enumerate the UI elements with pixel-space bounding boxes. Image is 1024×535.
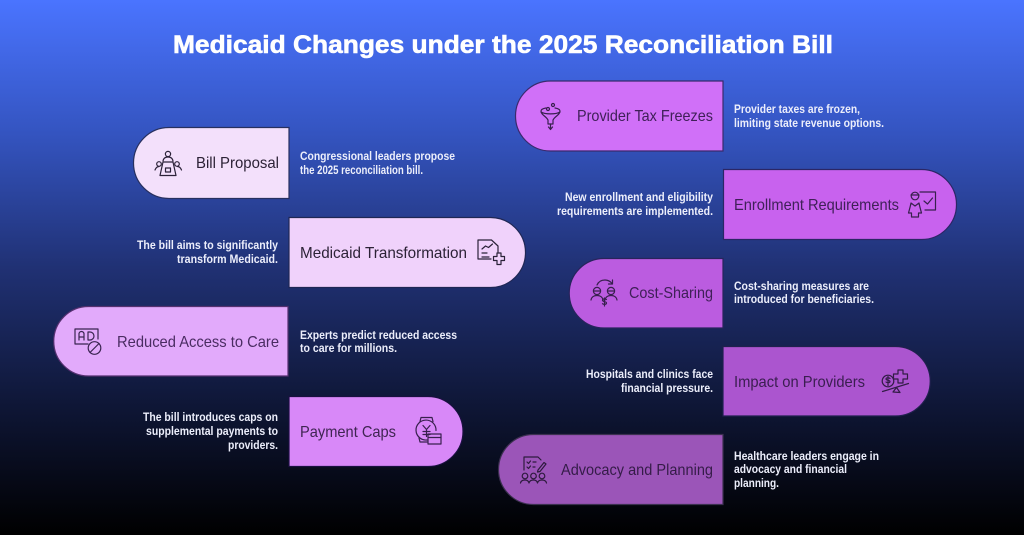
icon: document with chart and plus — [478, 240, 504, 264]
description: advocacy and planning: planning. — [734, 478, 779, 490]
panel: advocacy and planning — [498, 434, 723, 504]
description: cost-sharing: introduced for beneficiaries. — [734, 294, 874, 306]
panel: bill proposal — [134, 128, 289, 198]
description: payment caps: The bill introduces caps on — [143, 412, 278, 424]
description: impact on providers: financial pressure. — [621, 383, 713, 395]
panel: reduced access to care — [54, 306, 288, 376]
description: bill proposal: Congressional leaders propose — [300, 151, 455, 163]
description: payment caps: supplemental payments to — [146, 426, 278, 438]
description: provider tax freezes: limiting state revenue options. — [734, 118, 884, 130]
label: Payment Caps — [300, 424, 396, 441]
panel: cost-sharing — [569, 258, 723, 328]
panel: medicaid transformation — [289, 218, 526, 288]
description: enrollment requirements: requirements are implemented. — [557, 206, 713, 218]
label: Provider Tax Freezes — [577, 108, 713, 125]
description: bill proposal: the 2025 reconciliation bill. — [300, 165, 423, 177]
description: bill proposal — [300, 151, 455, 177]
icon: watch with yen and card — [416, 418, 441, 444]
description: advocacy and planning: Healthcare leaders engage in — [734, 451, 879, 463]
label: Medicaid Transformation — [300, 245, 467, 262]
description: reduced access to care: to care for millions. — [300, 343, 397, 355]
icon: person with checklist board — [908, 192, 936, 217]
description: cost-sharing — [734, 281, 874, 306]
label: Cost-Sharing — [629, 285, 713, 302]
label: Bill Proposal — [196, 155, 279, 172]
description: medicaid transformation — [137, 240, 279, 266]
panel: enrollment requirements — [724, 170, 956, 240]
icon: balance with dollar and medical cross — [882, 370, 908, 392]
description: advocacy and planning: advocacy and financial — [734, 464, 847, 476]
icon: people sharing cost — [591, 280, 617, 306]
description: payment caps: providers. — [228, 440, 278, 452]
icon: funnel with bubbles — [541, 104, 560, 130]
panel: payment caps — [289, 396, 463, 466]
description: enrollment requirements — [557, 192, 714, 218]
description: provider tax freezes: Provider taxes are frozen, — [734, 104, 860, 116]
label: Impact on Providers — [734, 374, 865, 391]
description: reduced access to care: Experts predict reduced access — [300, 330, 457, 342]
description: cost-sharing: Cost-sharing measures are — [734, 281, 869, 293]
icon: meeting table with people — [155, 151, 182, 176]
panel: impact on providers — [723, 346, 930, 416]
title: Medicaid Changes under the 2025 Reconciliation Bill — [173, 31, 833, 59]
panel: provider tax freezes — [516, 81, 723, 151]
icon: checklist, pen and group — [520, 457, 546, 483]
description: medicaid transformation: transform Medicaid. — [177, 254, 278, 266]
description: provider tax freezes — [734, 104, 884, 130]
description: impact on providers: Hospitals and clinics face — [586, 369, 713, 381]
description: payment caps — [143, 412, 278, 452]
label: Enrollment Requirements — [734, 197, 899, 214]
description: enrollment requirements: New enrollment and eligibility — [565, 192, 714, 204]
description: advocacy and planning — [734, 451, 879, 490]
icon: ad blocked — [75, 329, 101, 354]
description: medicaid transformation: The bill aims to significantly — [137, 240, 279, 252]
description: reduced access to care — [300, 330, 457, 355]
label: Advocacy and Planning — [561, 462, 713, 479]
description: impact on providers — [586, 369, 713, 395]
label: Reduced Access to Care — [117, 334, 279, 351]
